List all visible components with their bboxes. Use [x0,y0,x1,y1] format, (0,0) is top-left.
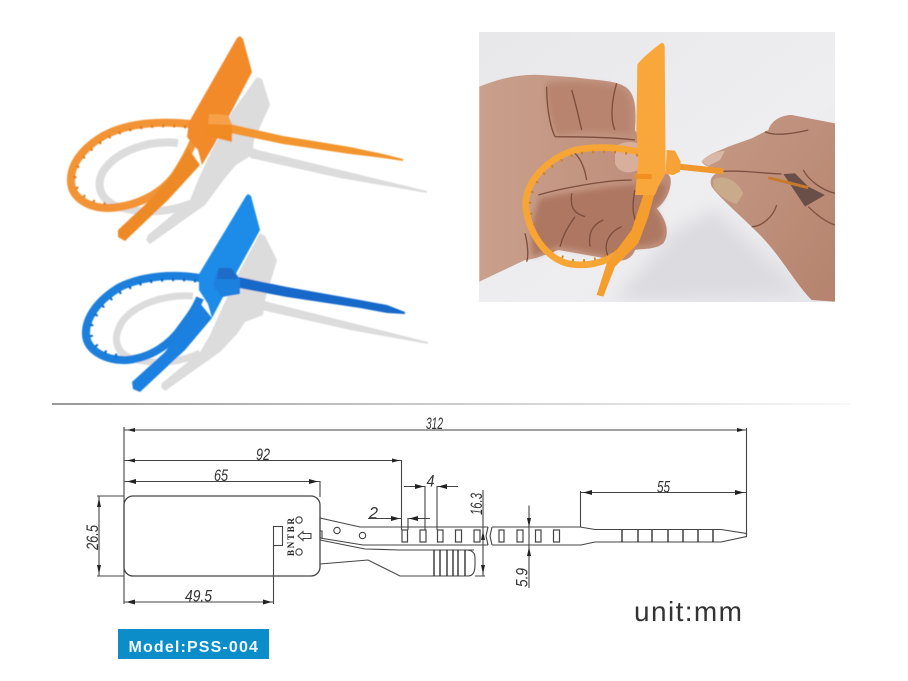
dimension 4 [404,472,458,530]
right hand creases [723,130,835,227]
dimension 26.5 [83,496,124,576]
dimension 92: 92 [256,445,270,464]
grip ribs [434,550,465,576]
model badge: Model:PSS-004 [128,639,259,656]
photo seal head [666,150,681,175]
blue seal strap loop [86,276,200,360]
left thumbnail [615,142,638,172]
dimension 55 [580,478,746,527]
blue seal stem [239,277,405,314]
photo: hands holding seal [479,32,835,302]
blue seal head [213,268,240,297]
photo seal barbs [635,174,652,179]
dimension 92 [124,445,402,530]
orange seal tag [187,36,252,165]
dimension 312: 312 [426,414,443,433]
dimension 65: 65 [214,466,228,485]
dimension 4: 4 [426,472,434,490]
neck circles [334,527,340,534]
dimension 2 [368,504,430,530]
model badge [118,629,269,659]
dimension 2: 2 [368,504,379,522]
dimension 49.5: 49.5 [185,586,212,606]
left hand fingers [532,82,666,257]
dimension 26.5: 26.5 [83,525,102,551]
right hand gap [783,173,825,207]
blue seal shadow [116,233,428,391]
dimension 16.3 [467,490,486,576]
photo seal tail [597,189,656,297]
tag arrow [298,532,311,540]
tag slot, markings and circles [274,517,311,556]
orange seal photo [71,36,427,244]
blue seal tag [199,194,260,318]
dimension 65 [124,466,320,497]
left hand base [479,75,671,282]
strap holes [402,530,560,542]
tag lettering: BNTBR [286,518,296,556]
photo background [479,32,835,302]
right hand [702,115,835,302]
unit label: unit:mm [634,596,743,627]
blue seal photo [86,194,428,392]
divider line [52,404,850,405]
dimension 5.9: 5.9 [512,568,532,587]
dimension 312 [124,414,747,604]
dimension 16.3: 16.3 [467,493,486,515]
strap outline [320,518,746,576]
technical drawing [83,414,747,606]
orange seal shadow [100,77,427,244]
left hand [479,75,671,282]
blue seal tail [132,302,212,392]
orange seal stem [230,124,403,161]
photo seal ring [526,148,652,265]
dimension 5.9 [512,506,532,588]
hand shadow [626,214,785,300]
stem ticks [622,530,713,542]
held seal [526,43,808,297]
dimension 49.5 [124,545,274,606]
photo seal tag [635,43,666,195]
orange seal strap loop [71,123,195,208]
orange seal tail [118,148,200,241]
orange seal head [205,114,232,142]
tag outline [124,496,320,576]
right hand base [702,115,835,302]
dimension 55: 55 [657,478,670,496]
left hand creases [525,83,642,262]
right hand nails [702,151,725,166]
photo seal stem [678,167,723,171]
